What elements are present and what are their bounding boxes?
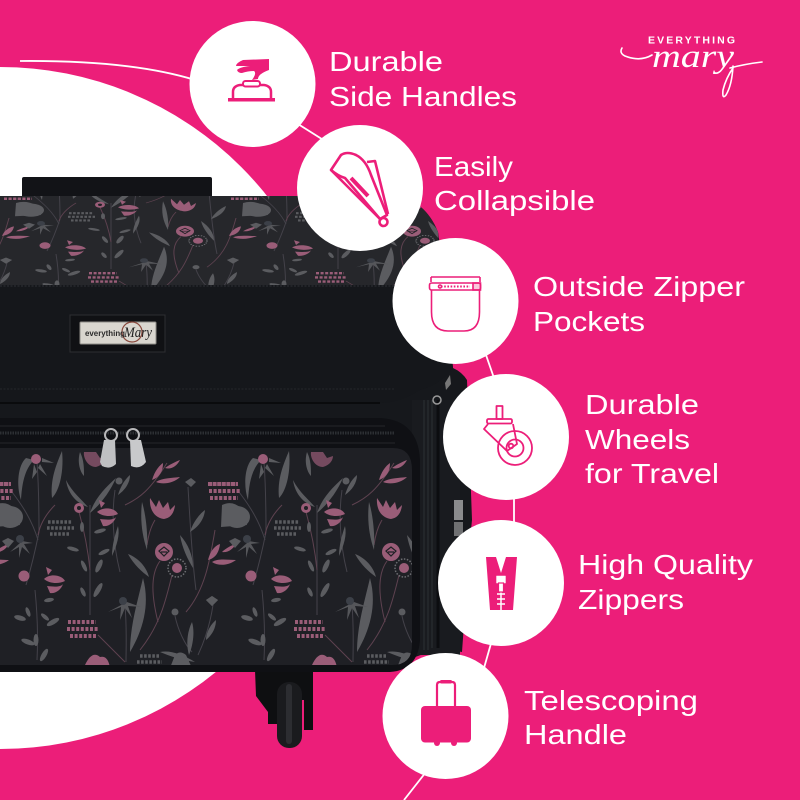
zipper pulls [100,429,146,468]
caster wheel [255,670,313,748]
feature text: telescoping handle: Handle [524,719,627,750]
feature circle: wheels [443,374,569,500]
feature text: outside zipper pockets: Pockets [533,306,645,337]
logo plate [70,315,165,352]
icon: suitcase [421,680,471,746]
feature text: telescoping handle [524,685,698,750]
icon: zipper pocket [430,277,480,331]
icon: folded bag [331,153,388,226]
logo plate: Mary [123,325,152,341]
logo plate: everything [85,328,125,338]
brand logo [621,34,762,97]
feature text: high quality zippers [578,549,753,615]
brand logo: mary [652,39,734,75]
bag body [0,196,472,672]
feature text: durable side handles: Side Handles [329,81,517,112]
feature text: high quality zippers: High Quality [578,549,753,580]
icon: hand lifting handle [228,59,275,102]
front pocket zipper band [0,418,420,672]
connector lines [20,61,514,800]
logo swash [621,48,762,97]
feature text: telescoping handle: Telescoping [524,685,698,716]
feature circle: pockets [392,238,518,364]
icon: caster wheel [484,406,532,465]
feature text: easily collapsible: Easily [434,151,513,182]
icon: zipper [486,557,517,610]
feature text: outside zipper pockets [533,271,745,337]
feature text: durable wheels for travel [585,389,719,489]
feature text: durable wheels for travel: Wheels [585,424,690,455]
feature text: high quality zippers: Zippers [578,584,684,615]
floral pocket panel [0,448,412,665]
floral lid panel [0,196,438,285]
feature circle: side handles [190,21,316,147]
rolling bag photo [0,177,472,748]
feature text: outside zipper pockets: Outside Zipper [533,271,745,302]
feature circle: collapsible [297,125,423,251]
feature text: durable side handles [329,46,517,112]
feature text: durable wheels for travel: for Travel [585,458,719,489]
feature text: durable wheels for travel: Durable [585,389,699,420]
white background circle [0,67,341,749]
feature circle: zippers [438,520,564,646]
side zipper pulls [433,375,463,536]
feature circle: telescoping handle [382,653,508,779]
brand logo: EVERYTHING [648,34,735,46]
feature text: easily collapsible: Collapsible [434,185,595,216]
telescoping handle top [22,177,212,196]
lid front [0,285,453,403]
feature text: durable side handles: Durable [329,46,443,77]
side zipper strip [412,400,460,655]
feature text: easily collapsible [434,151,595,216]
